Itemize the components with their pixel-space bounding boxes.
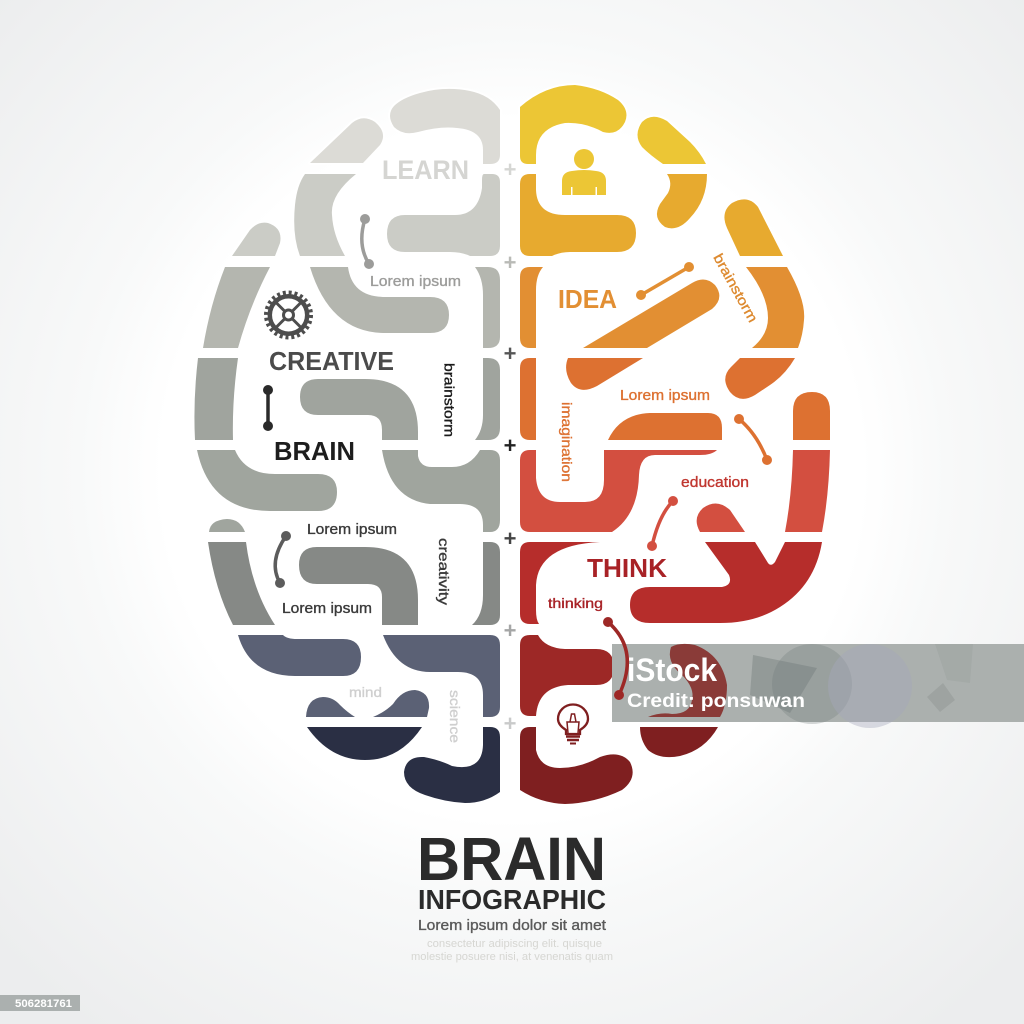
- text labels right: brainstorm: [710, 251, 761, 325]
- text labels right: thinking: [548, 595, 603, 611]
- connector: idea: [636, 262, 694, 300]
- text labels right: [548, 251, 761, 611]
- center plus markers: +: [504, 433, 516, 458]
- text labels right: IDEA: [558, 284, 617, 314]
- panel: left brain hemisphere: [194, 89, 500, 803]
- text labels left: Lorem ipsum: [282, 601, 372, 617]
- text labels left: BRAIN: [274, 436, 355, 466]
- text labels left: science: [447, 690, 463, 743]
- text labels left: CREATIVE: [269, 346, 394, 376]
- crimson lobe seen through the band: [648, 644, 727, 717]
- text labels right: THINK: [587, 553, 667, 583]
- right lobe row 6: red: [520, 542, 822, 624]
- right lobe row 5: coral red: [520, 450, 830, 532]
- center plus markers: +: [504, 526, 516, 551]
- icon: gear: [266, 292, 311, 338]
- text labels right: imagination: [559, 402, 575, 482]
- subtitle: Lorem ipsum dolor sit amet: [418, 918, 606, 934]
- title: INFOGRAPHIC: [418, 884, 606, 915]
- connector: orange: [734, 414, 772, 465]
- right lobe row 8: maroon: [520, 727, 718, 804]
- left lobe row 1: light grey: [310, 89, 500, 164]
- text labels right: education: [681, 475, 749, 491]
- description: consectetur adipiscing elit. quisque: [427, 938, 602, 950]
- connector: thinking: [603, 617, 627, 700]
- connector: lorem ipsum: [275, 531, 291, 588]
- left lobe row 6: dark grey: [208, 542, 500, 625]
- text labels left: brainstorm: [442, 363, 458, 437]
- left lobe row 2: pale grey: [232, 174, 500, 256]
- watermark text: iStock: [627, 652, 717, 688]
- icon: person: [562, 149, 606, 195]
- left lobe row 7: slate blue: [238, 635, 500, 717]
- center plus markers: +: [504, 341, 516, 366]
- text labels left: creativity: [436, 538, 452, 605]
- text labels left: [269, 155, 469, 743]
- center plus markers: +: [504, 157, 516, 182]
- left lobe row 8: navy: [307, 727, 500, 803]
- text labels left: Lorem ipsum: [370, 274, 461, 290]
- right lobe row 2: gold: [520, 174, 783, 256]
- right lobe row 3: orange: [520, 267, 804, 348]
- text labels left: Lorem ipsum: [307, 522, 397, 538]
- center plus markers: +: [504, 618, 516, 643]
- right lobe row 1: yellow: [520, 85, 706, 164]
- center plus markers: +: [504, 250, 516, 275]
- description: molestie posuere nisi, at venenatis quam: [411, 951, 613, 963]
- center plus markers: [504, 157, 516, 736]
- left lobe row 5: sage grey: [197, 450, 500, 532]
- center plus markers: +: [504, 711, 516, 736]
- image id tag: 506281761: [15, 998, 72, 1010]
- watermark band: [603, 617, 1024, 728]
- connector: education: [647, 496, 678, 551]
- title: BRAIN: [417, 825, 606, 893]
- left lobe row 4: mid grey: [194, 358, 500, 440]
- text labels left: LEARN: [382, 155, 469, 185]
- image id tag: [0, 995, 80, 1011]
- icon: light bulb: [558, 704, 588, 744]
- left lobe row 3: grey: [203, 267, 500, 348]
- watermark text: [627, 652, 805, 712]
- right lobe row 7: crimson: [520, 635, 614, 716]
- panel: right brain hemisphere: [520, 85, 830, 804]
- description: [411, 938, 613, 963]
- connector: learn: [360, 214, 374, 269]
- text labels right: Lorem ipsum: [620, 388, 710, 404]
- watermark text: Credit: ponsuwan: [627, 691, 805, 712]
- right lobe row 4: dark orange: [520, 358, 830, 440]
- connector: creative brain: [263, 385, 273, 431]
- text labels left: mind: [349, 684, 382, 700]
